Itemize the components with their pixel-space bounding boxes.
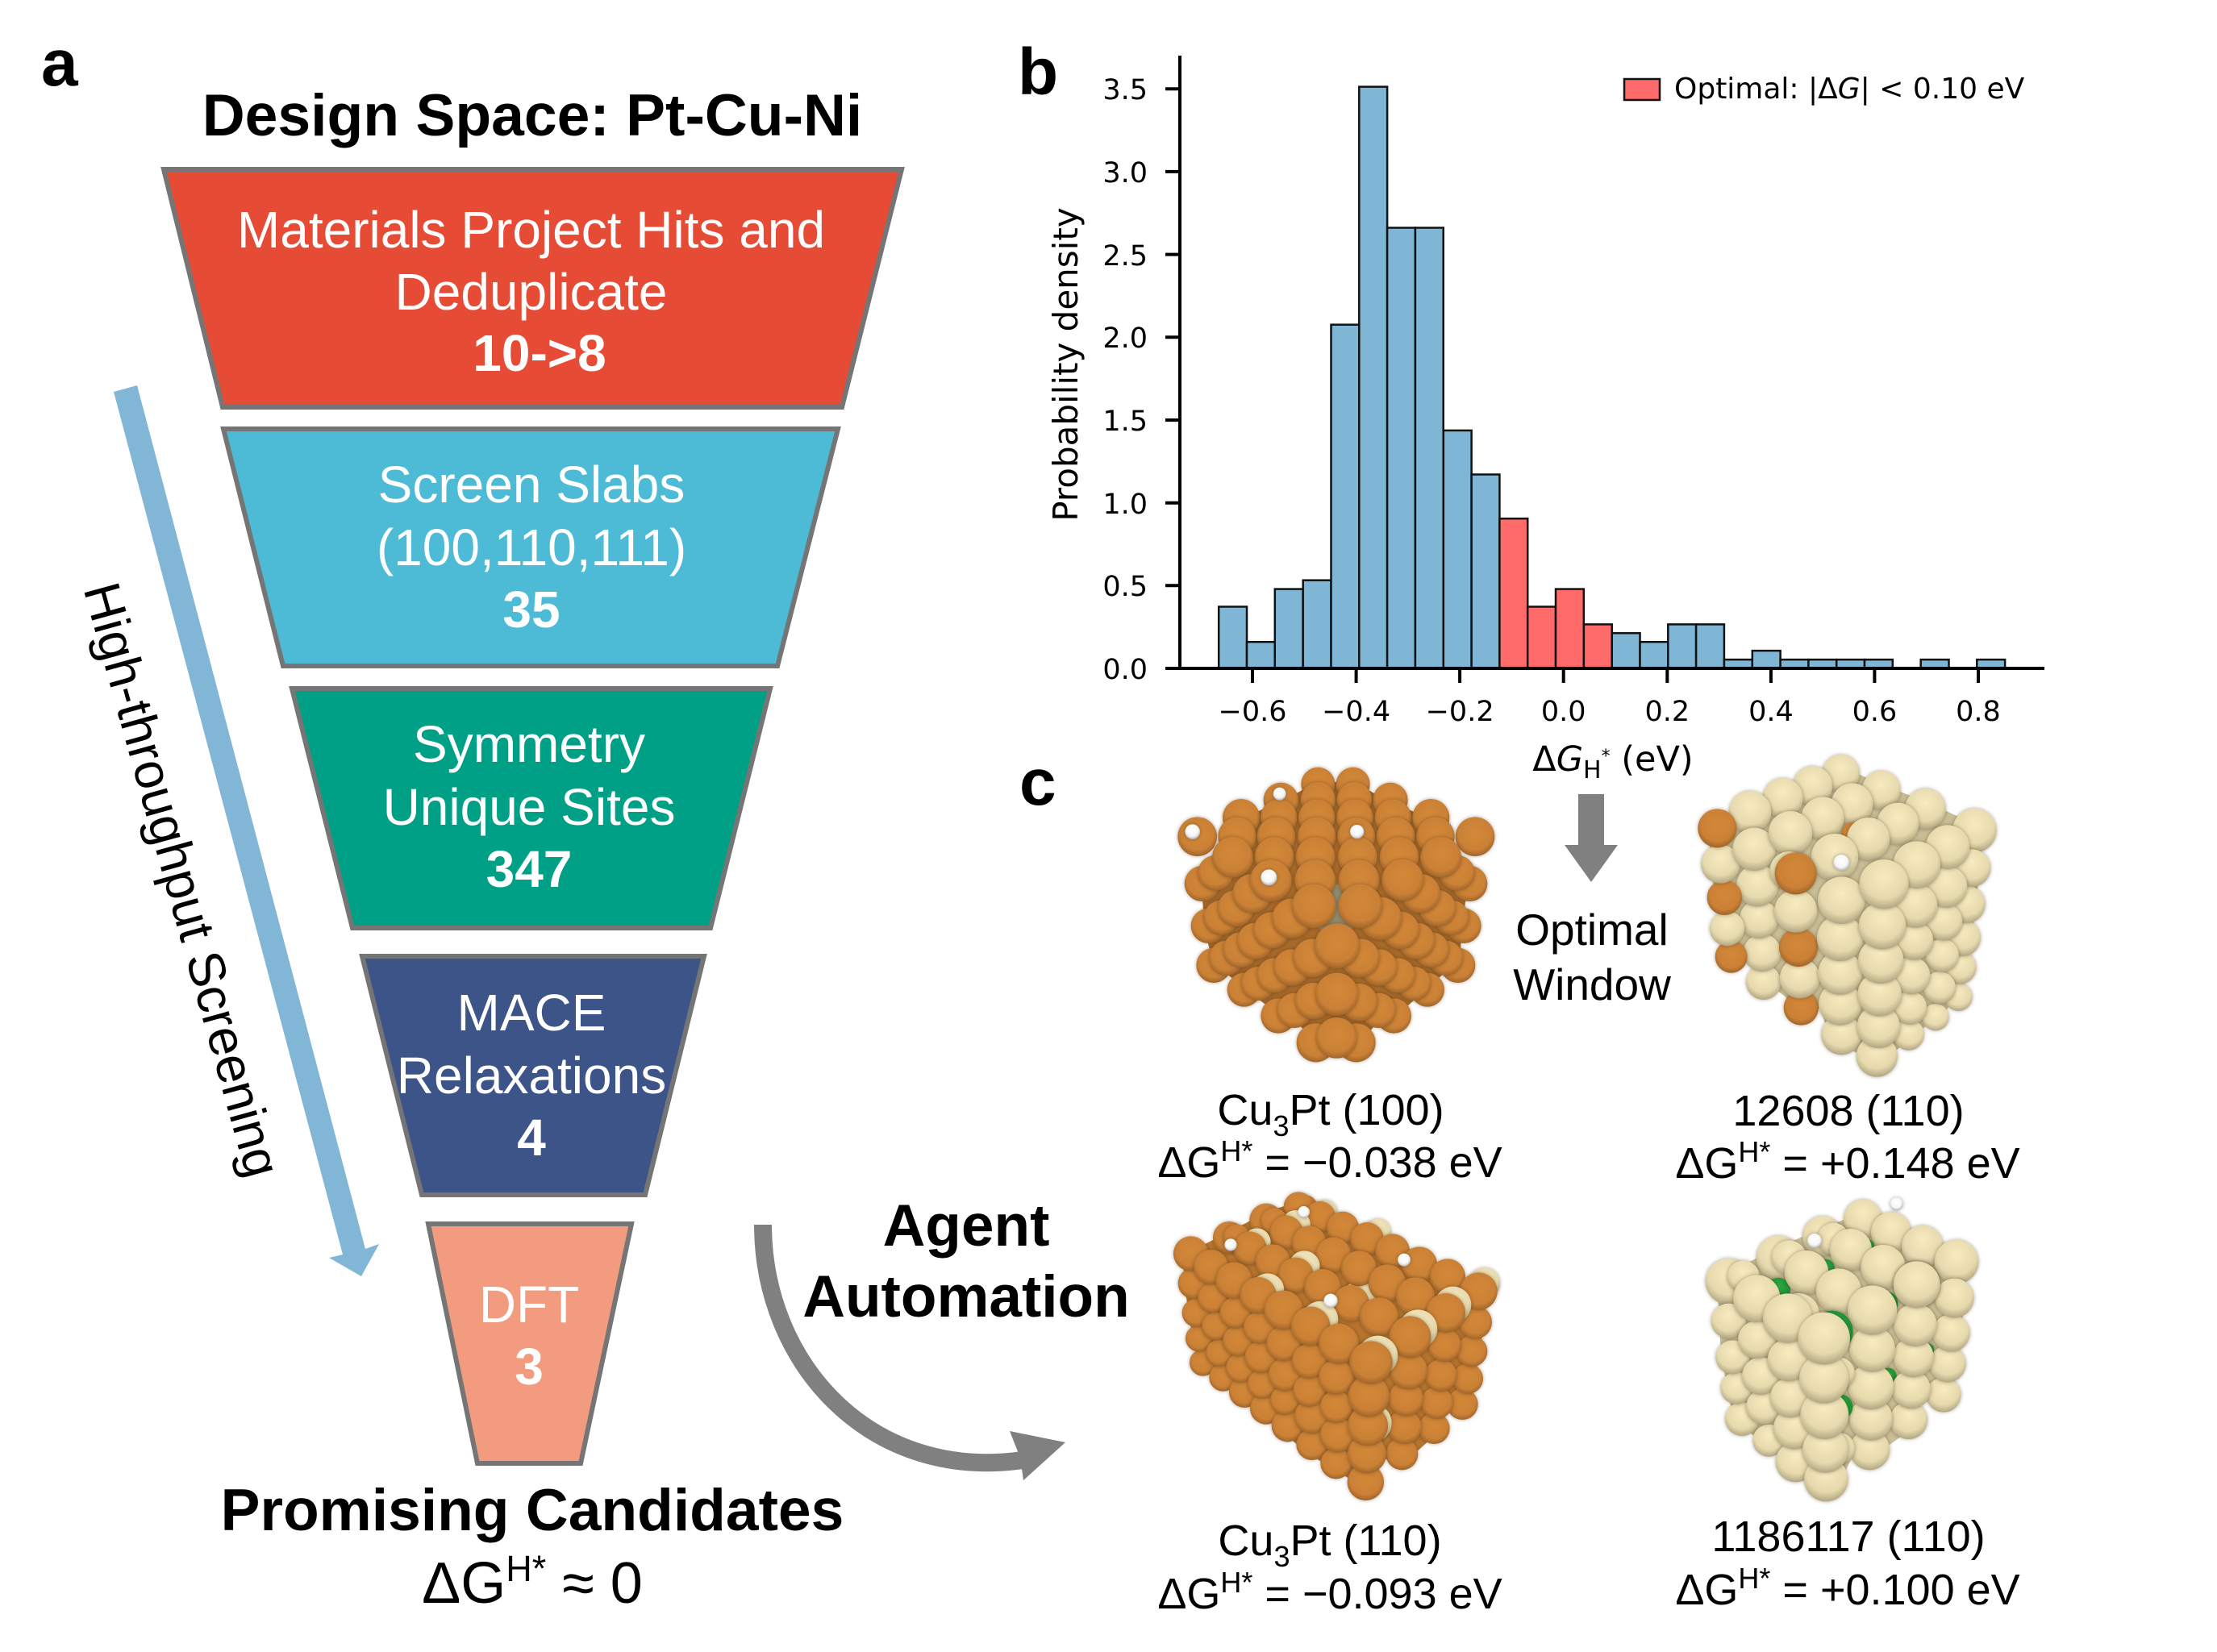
y tick labels: 3.0: [1102, 157, 1148, 189]
legend: Optimal: |ΔG| < 0.10 eV: [1674, 73, 2025, 106]
caption: 1186117 (110): = +0.100 eV: [1770, 1566, 2020, 1614]
funnel stage 4: MACE relaxations: Relaxations: [397, 1047, 666, 1105]
caption: Cu3Pt (110): Cu: [1218, 1517, 1273, 1565]
funnel stage 5: DFT: [428, 1224, 631, 1463]
x axis label: (eV): [1611, 739, 1694, 780]
funnel stage 5: DFT: DFT: [479, 1275, 579, 1334]
funnel stage 3: symmetry unique sites: 347: [486, 840, 572, 898]
x tick labels: −0.4: [1322, 696, 1390, 728]
panel label c: c: [1019, 746, 1056, 819]
x tick labels: 0.8: [1956, 696, 2001, 728]
funnel stage 1: materials project: Materials Project Hits and: [237, 201, 825, 259]
y tick labels: 2.0: [1102, 322, 1148, 355]
caption: Cu3Pt (110): ΔG: [1157, 1570, 1220, 1618]
histogram bars: [1219, 87, 2005, 668]
caption: 12608 (110): = +0.148 eV: [1770, 1139, 2020, 1188]
second row: [1249, 1204, 1471, 1444]
formula: delta G near zero: H*: [506, 1548, 546, 1589]
funnel stage 2: screen slabs: Screen Slabs: [378, 456, 685, 514]
x axis label: H: [1583, 756, 1602, 784]
caption: Cu3Pt (100): = −0.038 eV: [1252, 1138, 1502, 1187]
y tick labels: [1102, 74, 1148, 686]
structure: Cu3Pt (110): [1173, 1192, 1500, 1500]
text: optimal window: Window: [1513, 959, 1671, 1009]
caption: 12608 (110): H*: [1738, 1135, 1770, 1168]
y tick labels: 0.5: [1102, 571, 1148, 603]
text: agent automation: Agent: [883, 1193, 1049, 1259]
funnel stage 2: screen slabs: (100,110,111): [377, 518, 686, 576]
x tick labels: 0.4: [1748, 696, 1794, 728]
third row: [1213, 1221, 1437, 1470]
funnel stage 3: symmetry unique sites: Unique Sites: [383, 778, 675, 836]
panel: screening funnel: [164, 169, 902, 1463]
funnel stage 2: screen slabs: [223, 429, 838, 666]
text: optimal window: Optimal: [1515, 905, 1669, 955]
formula: delta G near zero: ≈ 0: [546, 1551, 643, 1616]
text: high-throughput screening: High-throughput Screening: [73, 576, 292, 1184]
caption: Cu3Pt (100): Cu: [1217, 1086, 1273, 1134]
x axis label: *: [1602, 747, 1611, 767]
caption: 12608 (110): ΔG: [1675, 1139, 1738, 1188]
caption: 1186117 (110): 1186117 (110): [1711, 1513, 1986, 1561]
caption: Cu3Pt (110): = −0.093 eV: [1252, 1570, 1502, 1618]
arrow: down to optimal window: [1565, 794, 1618, 882]
funnel stage 2: screen slabs: 35: [502, 580, 561, 639]
x tick labels: 0.2: [1644, 696, 1690, 728]
panel label b: b: [1018, 35, 1058, 109]
caption: Cu3Pt (100): 3: [1273, 1109, 1289, 1142]
x tick labels: [1218, 696, 2001, 728]
y axis label: Probability density: [1046, 207, 1086, 522]
funnel stage 4: MACE relaxations: [362, 956, 704, 1195]
caption: 1186117 (110): ΔG: [1675, 1566, 1738, 1614]
caption: Cu3Pt (100): H*: [1220, 1134, 1252, 1167]
front row: [1173, 1236, 1398, 1500]
text: agent automation: Automation: [802, 1264, 1130, 1330]
funnel stage 3: symmetry unique sites: Symmetry: [413, 715, 645, 773]
caption: 12608 (110): 12608 (110): [1732, 1087, 1965, 1135]
x tick labels: −0.6: [1218, 696, 1287, 728]
caption: Cu3Pt (100): ΔG: [1157, 1138, 1220, 1187]
caption: Cu3Pt (110): H*: [1220, 1566, 1252, 1599]
funnel stage 1: materials project: Deduplicate: [395, 263, 668, 321]
caption: Cu3Pt (110): 3: [1273, 1540, 1290, 1573]
funnel stage 1: materials project: [164, 169, 902, 407]
funnel stage 1: materials project: 10->8: [473, 324, 606, 382]
arrow: high-throughput direction: [114, 385, 379, 1276]
panel label a: a: [41, 27, 79, 100]
structure: Cu3Pt (100): [1177, 768, 1494, 1062]
panel: histogram: [1046, 56, 2044, 784]
caption: Cu3Pt (100): Pt (100): [1289, 1086, 1444, 1134]
y tick labels: 0.0: [1102, 654, 1148, 686]
structure: 12608 (110): [1698, 755, 1997, 1077]
x axis label: ΔG: [1532, 739, 1583, 780]
caption: Cu3Pt (110): Pt (110): [1290, 1517, 1442, 1565]
y tick labels: 1.5: [1102, 406, 1148, 438]
structure: 1186117 (110): [1706, 1197, 1978, 1501]
y tick labels: 1.0: [1102, 489, 1148, 521]
heading: promising candidates: Promising Candidates: [221, 1477, 844, 1543]
funnel stage 5: DFT: 3: [515, 1338, 544, 1396]
back row: [1284, 1192, 1500, 1420]
funnel stage 4: MACE relaxations: MACE: [457, 984, 606, 1042]
x tick labels: 0.6: [1852, 696, 1897, 728]
panel a title: Design Space: Pt-Cu-Ni: [202, 82, 862, 148]
histogram axes and ticks: [1165, 56, 2044, 683]
arrow: agent automation curve: [763, 1225, 1065, 1480]
hydrogen atoms: [1224, 1206, 1411, 1308]
y tick labels: 2.5: [1102, 240, 1148, 273]
funnel stage 3: symmetry unique sites: [292, 689, 770, 928]
funnel stage 4: MACE relaxations: 4: [517, 1109, 546, 1167]
x tick labels: 0.0: [1541, 696, 1586, 728]
x tick labels: −0.2: [1426, 696, 1494, 728]
y tick labels: 3.5: [1102, 74, 1148, 106]
caption: 1186117 (110): H*: [1738, 1562, 1770, 1595]
formula: delta G near zero: ΔG: [422, 1551, 506, 1616]
